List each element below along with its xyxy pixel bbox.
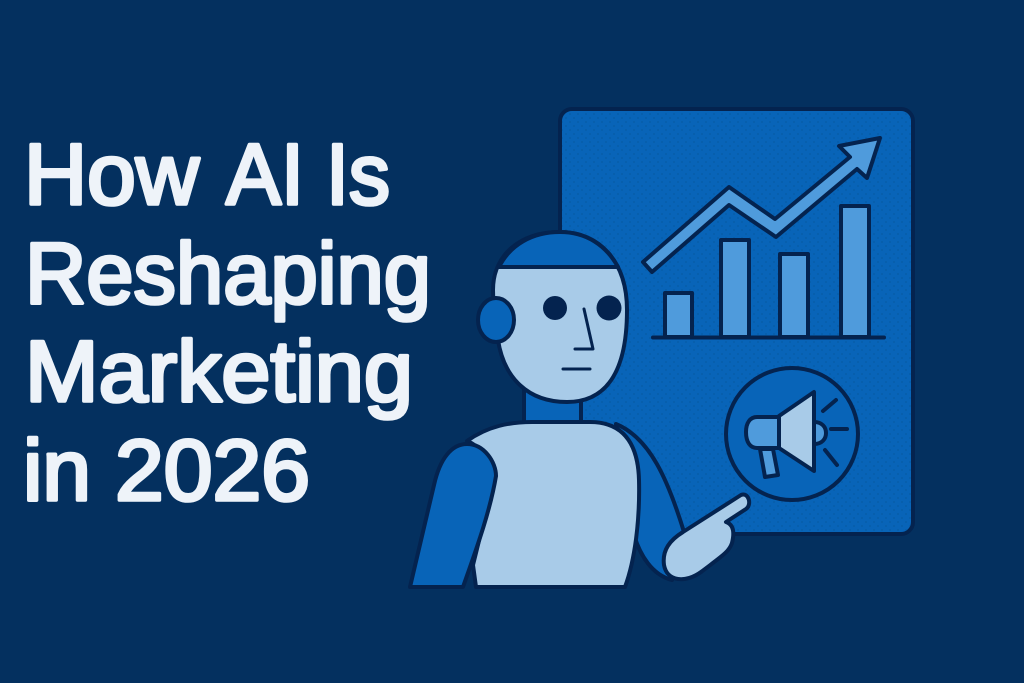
robot torso [467,422,639,587]
robot head [493,232,627,402]
robot nose [575,309,593,349]
title [23,127,431,519]
icon: growth arrow [643,138,880,272]
title: 2026 [115,423,310,519]
icon: megaphone badge [726,368,858,500]
panel: presentation board [560,109,913,534]
robot left arm [410,444,496,587]
title: Marketing [25,324,413,420]
robot head cap [499,232,618,267]
robot figure [410,232,749,587]
robot ear [478,298,514,342]
title: Reshaping [25,226,431,322]
bar chart [653,206,884,338]
robot neck [524,385,581,423]
robot pointing hand [664,495,749,579]
title: How [24,127,200,223]
robot right arm [616,424,684,580]
title: Is [326,127,390,223]
title: in [23,423,91,519]
robot eyes [543,296,622,320]
title: AI [226,127,304,223]
robot mouth [563,368,590,370]
